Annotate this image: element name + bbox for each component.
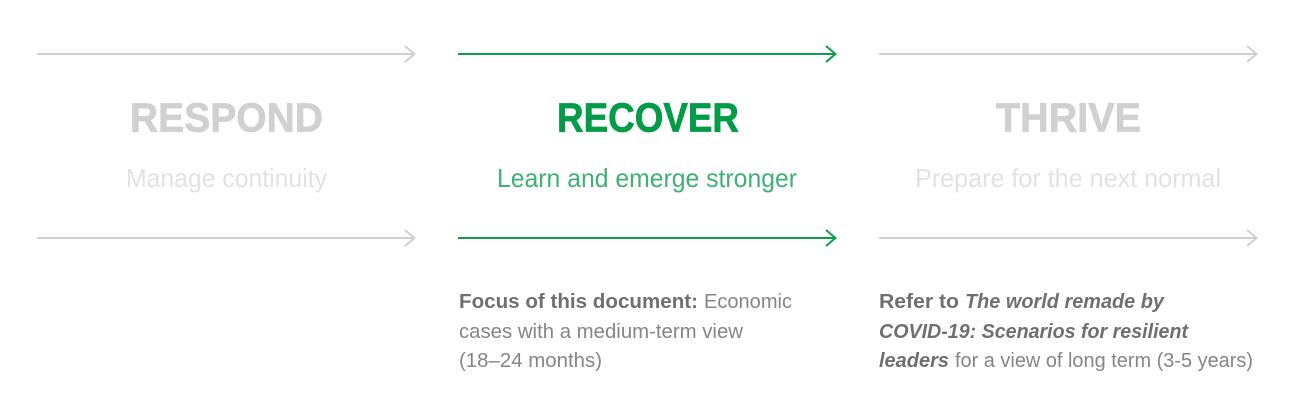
heading: recover: RECOVER	[557, 94, 739, 140]
panel: thrive	[879, 46, 1256, 372]
arrow: respond top	[37, 46, 414, 62]
panel: respond	[37, 46, 414, 246]
text block: refer to scenarios report: leaders	[879, 349, 949, 372]
text block: focus of this document: cases with a medium-term view	[459, 320, 743, 343]
text block: refer to scenarios report: for a view of long term (3-5 years)	[955, 349, 1253, 372]
heading: thrive: THRIVE	[996, 94, 1141, 140]
text block: refer to scenarios report: COVID-19: Scenarios for resilient	[879, 320, 1189, 343]
text block: refer to scenarios report	[879, 290, 1253, 372]
arrow: respond bottom	[37, 230, 414, 246]
panel: recover	[458, 46, 836, 372]
text block: focus of this document: Economic	[704, 290, 792, 313]
subheading: manage continuity: Manage continuity	[126, 163, 327, 193]
subheading: prepare for the next normal: Prepare for the next normal	[915, 163, 1221, 193]
text block: focus of this document: Focus of this document:	[459, 290, 698, 313]
arrow: recover top	[458, 46, 836, 62]
text block: refer to scenarios report: Refer to	[879, 290, 959, 313]
arrow: thrive bottom	[879, 230, 1256, 246]
subheading: learn and emerge stronger: Learn and emerge stronger	[497, 163, 797, 193]
arrow: recover bottom	[458, 230, 836, 246]
arrow: thrive top	[879, 46, 1256, 62]
text block: refer to scenarios report: The world remade by	[965, 290, 1166, 313]
heading: respond: RESPOND	[130, 94, 323, 140]
text block: focus of this document	[459, 290, 792, 372]
text block: focus of this document: (18–24 months)	[459, 349, 602, 372]
